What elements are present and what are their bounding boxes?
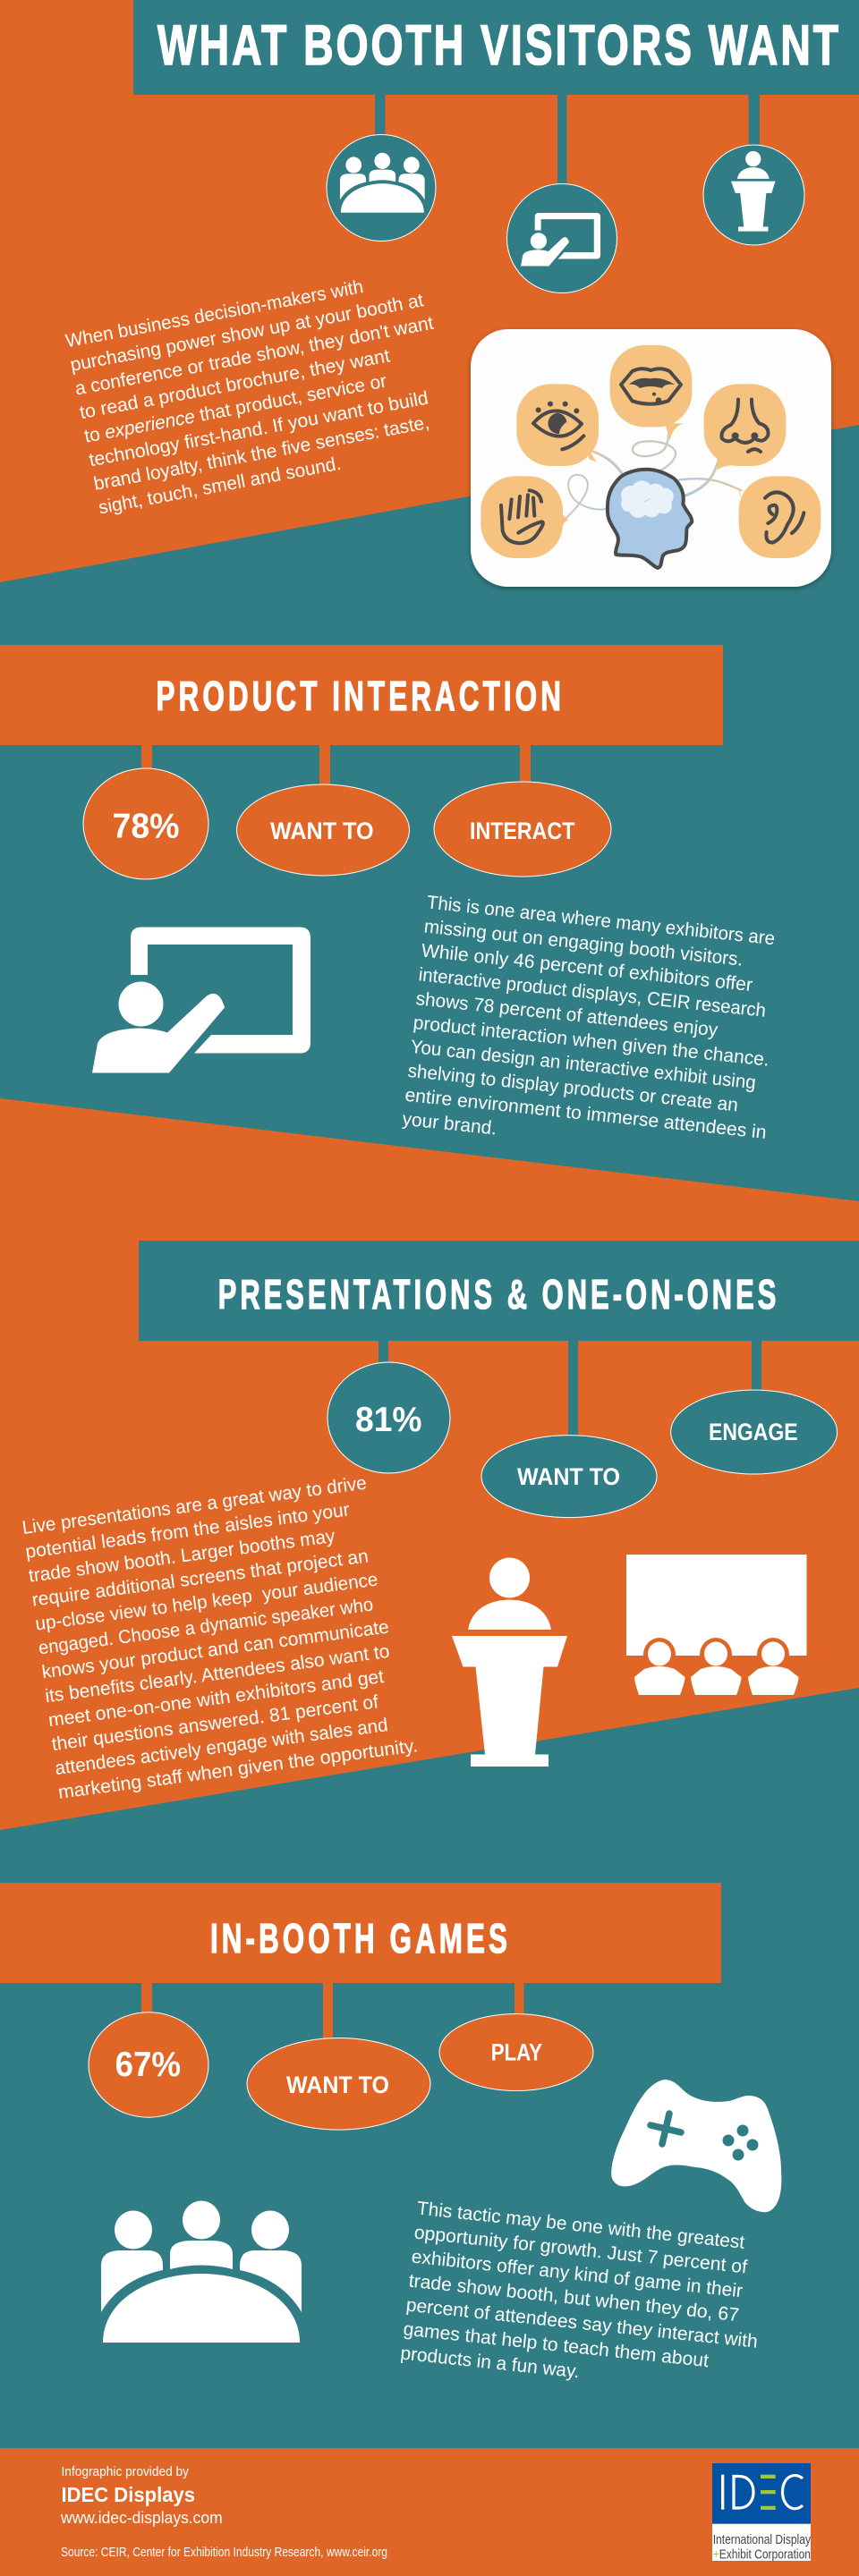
icon: podium speaker xyxy=(452,1558,567,1767)
text block: product interaction xyxy=(401,892,776,1143)
stat bubble: want to xyxy=(247,1983,430,2130)
stat bubble: interact: INTERACT xyxy=(470,818,575,844)
stat bubble: engage xyxy=(671,1341,838,1474)
text block: product interaction: You can design an interactive exhibit using xyxy=(410,1037,757,1093)
icon: audience facing screen xyxy=(626,1555,807,1695)
text block: presentations: trade show booth. Larger booths may xyxy=(28,1526,336,1587)
panel: presentations heading xyxy=(139,1241,859,1341)
text block: presentations: engaged. Choose a dynamic speaker who xyxy=(38,1594,374,1658)
text block: presentations: potential leads from the aisles into your xyxy=(24,1499,351,1563)
text block: product interaction: entire environment to immerse attendees in xyxy=(404,1085,768,1143)
text block: product interaction: missing out on engaging booth visitors. xyxy=(423,916,744,970)
stat bubble: want to xyxy=(481,1341,657,1518)
icon: presenter at board xyxy=(92,927,310,1073)
text block: product interaction: interactive product displays, CEIR research xyxy=(418,964,767,1021)
text block: presentations: Live presentations are a great way to drive xyxy=(21,1473,368,1538)
background: presentations orange band xyxy=(0,1098,859,1830)
text block: product interaction: While only 46 percent of exhibitors offer xyxy=(421,940,753,996)
text block: presentations: their questions answered. 81 percent of xyxy=(50,1691,379,1755)
text block: intro: technology first-hand. If you want to build xyxy=(88,388,430,470)
background: top orange band xyxy=(0,0,859,582)
text block: intro: brand loyalty, think the five senses: taste, xyxy=(92,412,431,495)
text block: presentations: up-close view to help keep your audience xyxy=(34,1569,379,1635)
hanging icon: presenter at board xyxy=(506,95,617,293)
stat bubble: want to: WANT TO xyxy=(286,2072,389,2098)
stat bubble: play: PLAY xyxy=(491,2039,542,2066)
panel: product interaction heading xyxy=(0,645,723,745)
text block: in-booth games: exhibitors offer any kind of game in their xyxy=(411,2246,744,2301)
text block: product interaction: product interaction when given the chance. xyxy=(412,1013,770,1071)
logo: IDEC xyxy=(712,2463,811,2563)
panel: footer xyxy=(0,2448,859,2576)
text block: presentations: meet one-on-one with exhibitors and get xyxy=(47,1666,386,1731)
stat bubble: 67% xyxy=(89,1983,208,2117)
stat bubble: want to xyxy=(236,745,410,876)
stat bubble: 78%: 78% xyxy=(113,807,179,846)
text block: intro: purchasing power show up at your booth at xyxy=(69,290,425,376)
footer: company: IDEC Displays xyxy=(61,2483,195,2506)
hanging icon: podium speaker xyxy=(703,95,804,245)
icon: game controller xyxy=(611,2080,781,2212)
text block: in-booth games: This tactic may be one with the greatest xyxy=(416,2198,745,2253)
text block: in-booth games: opportunity for growth. Just 7 percent of xyxy=(413,2222,748,2277)
text block: intro: sight, touch, smell and sound. xyxy=(97,453,343,519)
footer: website: www.idec-displays.com xyxy=(60,2509,223,2527)
heading: PRODUCT INTERACTION xyxy=(156,673,565,719)
panel: title header xyxy=(133,0,859,95)
text block: intro: When business decision-makers with xyxy=(64,276,365,352)
text block: product interaction: shows 78 percent of attendees enjoy xyxy=(415,988,719,1040)
text block: presentations: attendees actively engage with sales and xyxy=(54,1715,389,1779)
text block: presentations xyxy=(21,1473,419,1803)
text block: in-booth games: percent of attendees say they interact with xyxy=(405,2294,759,2352)
logo: IDEC: +Exhibit Corporation xyxy=(713,2547,811,2563)
text block: intro xyxy=(64,276,435,519)
stat bubble: want to: WANT TO xyxy=(270,818,374,844)
text block: in-booth games: games that help to teach them about xyxy=(403,2318,710,2371)
text block: presentations: its benefits clearly. Attendees also want to xyxy=(44,1641,391,1707)
text block: product interaction: This is one area where many exhibitors are xyxy=(426,892,776,949)
stat bubble: 67%: 67% xyxy=(115,2046,181,2084)
stat bubble: interact xyxy=(434,745,611,877)
footer: source: Source: CEIR, Center for Exhibition Industry Research, www.ceir.org xyxy=(61,2546,387,2560)
text block: intro: to experience that product, service or xyxy=(82,371,388,447)
panel: five senses card xyxy=(471,329,831,587)
text block: in-booth games: products in a fun way. xyxy=(399,2343,581,2382)
text block: product interaction: shelving to display products or create an xyxy=(407,1061,739,1115)
logo: IDEC: International Display xyxy=(713,2532,811,2547)
hanging icon: meeting table xyxy=(327,95,436,242)
text block: presentations: marketing staff when given the opportunity. xyxy=(57,1735,419,1803)
icon: meeting table xyxy=(101,2200,302,2343)
footer: credit: Infographic provided by xyxy=(61,2464,189,2479)
stat bubble: play xyxy=(439,1983,593,2091)
text block: intro: a conference or trade show, they don't want xyxy=(73,313,435,400)
text block: presentations: knows your product and can communicate xyxy=(40,1617,390,1682)
stat bubble: 81%: 81% xyxy=(355,1401,422,1439)
text block: intro: to read a product brochure, they want xyxy=(78,345,392,423)
panel: in-booth games heading xyxy=(0,1883,721,1983)
stat bubble: 78% xyxy=(83,745,208,879)
text block: in-booth games: trade show booth, but when they do, 67 xyxy=(408,2270,740,2326)
stat bubble: want to: WANT TO xyxy=(517,1463,620,1490)
text block: in-booth games xyxy=(399,2198,759,2382)
stat bubble: 81% xyxy=(327,1341,450,1473)
text block: product interaction: your brand. xyxy=(401,1109,498,1140)
heading: IN-BOOTH GAMES xyxy=(210,1915,511,1962)
text block: presentations: require additional screens that project an xyxy=(30,1546,370,1611)
stat bubble: engage: ENGAGE xyxy=(709,1419,798,1445)
